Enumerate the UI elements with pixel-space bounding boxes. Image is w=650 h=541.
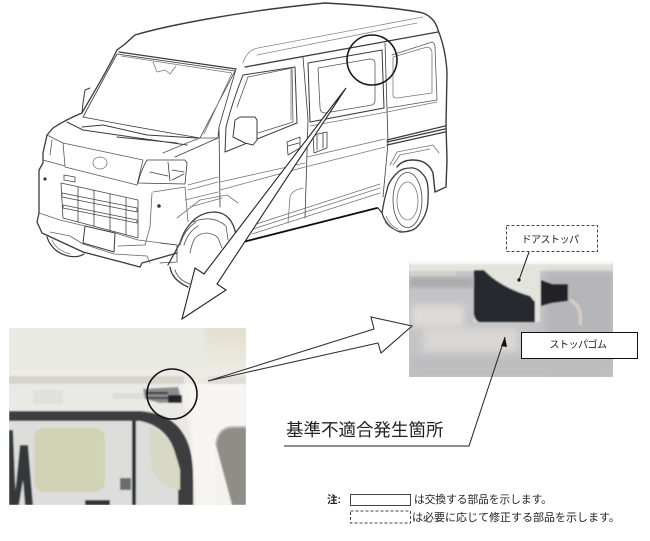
hood and front: [43, 135, 218, 185]
legend: 注:: [327, 493, 341, 506]
callout: door stopper: [506, 226, 598, 282]
front left tyre: [47, 237, 84, 257]
callout: stopper rubber: ストッパゴム: [550, 338, 607, 351]
legend: は交換する部品を示します。: [414, 494, 552, 506]
callout: stopper rubber: [522, 332, 638, 358]
rear rubber stub: [541, 280, 568, 306]
door seams: [175, 43, 388, 218]
large arrow from van to rear door photo: [182, 88, 346, 319]
door mirror: [233, 117, 257, 145]
door frame interior: [9, 419, 184, 505]
rear wheel: [378, 168, 428, 232]
belt lines: [185, 139, 385, 200]
photo: rear door opening: [9, 320, 255, 505]
rocker lines: [250, 184, 380, 234]
front right wheel: [168, 212, 236, 287]
legend: は必要に応じて修正する部品を示します。: [412, 510, 620, 524]
door handle front: [287, 137, 300, 155]
bumper: [39, 213, 177, 263]
headlight right: [138, 160, 187, 184]
sliding door window: [308, 50, 384, 122]
callout: door stopper: ドアストッパ: [522, 234, 579, 246]
heading: location of non-conformity with leader line: [284, 337, 507, 446]
grille: [61, 175, 138, 238]
rear side stripe: [387, 126, 445, 145]
windshield: [119, 52, 236, 69]
circle on photo: door stopper location: [147, 369, 197, 419]
arrow from rear door photo to close-up: [208, 317, 412, 381]
van line drawing: [37, 3, 447, 287]
wipers: [67, 122, 197, 145]
van body outline: [117, 3, 447, 192]
rear door handle: [313, 132, 327, 153]
front door window: [225, 67, 297, 152]
stopper parts: [143, 387, 182, 403]
black stopper rubber: [474, 270, 535, 322]
photo: door stopper close-up: [409, 258, 613, 377]
quarter window: [388, 42, 437, 108]
white stopper housing: [474, 270, 540, 322]
rear quarter window: [216, 427, 246, 505]
mirror left: [82, 88, 90, 113]
roof rail: [245, 32, 438, 67]
number plate: [83, 226, 115, 252]
heading: location of non-conformity with leader line: 基準不適合発生箇所: [286, 420, 444, 440]
circle on van: door stopper location: [347, 35, 397, 85]
legend: [327, 493, 620, 524]
